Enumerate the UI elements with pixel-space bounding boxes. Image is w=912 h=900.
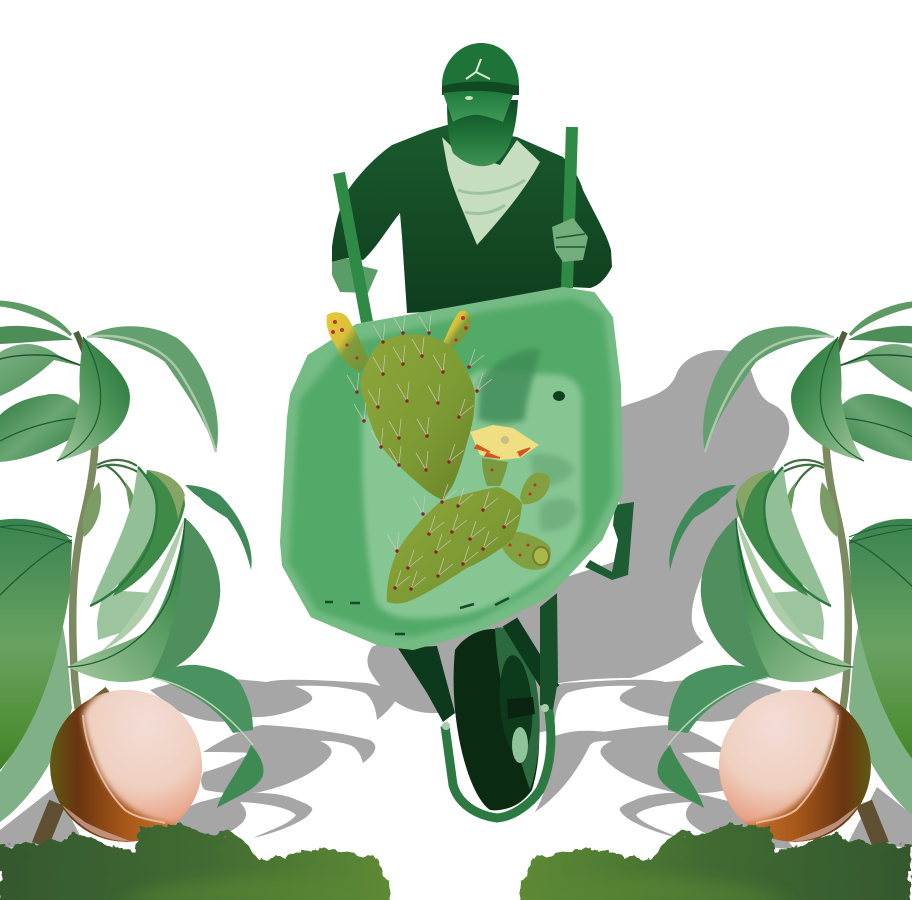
peach lower rim xyxy=(62,805,130,841)
peach skin xyxy=(50,690,202,842)
left handle xyxy=(339,173,367,322)
large left leaf xyxy=(0,519,72,770)
third leaf xyxy=(0,344,85,396)
top right leaf xyxy=(87,326,218,452)
left strut xyxy=(398,646,455,722)
lower right leaf xyxy=(153,665,253,733)
tyre side wall xyxy=(495,627,540,790)
wheelbarrow tray xyxy=(283,290,620,647)
right peach plant xyxy=(658,302,912,845)
left hand xyxy=(332,258,378,293)
cap band xyxy=(442,82,519,95)
upper left leaf edge xyxy=(0,525,72,543)
nub end xyxy=(533,547,549,565)
flower xyxy=(470,425,539,460)
lower pad xyxy=(387,487,522,604)
wheel and frame xyxy=(398,593,558,818)
peach crease xyxy=(83,715,165,823)
rim hub xyxy=(512,727,528,763)
tray outer rim xyxy=(283,290,620,647)
left bush xyxy=(0,824,392,900)
left wide leaf xyxy=(0,394,79,462)
tyre xyxy=(454,629,539,810)
top nub xyxy=(520,473,550,504)
thin branches xyxy=(97,460,138,490)
big leaf light strip xyxy=(100,517,185,652)
shadow: right plant xyxy=(535,678,912,850)
u frame xyxy=(445,706,551,818)
flower centre xyxy=(501,436,509,444)
upper stem xyxy=(76,332,90,372)
shadow: gardener cast shadow xyxy=(367,350,789,740)
tray basin xyxy=(362,370,582,618)
upper pad xyxy=(360,334,475,500)
rear leg xyxy=(585,502,634,580)
visor xyxy=(443,91,513,122)
shadow: left plant xyxy=(0,678,397,850)
sweater xyxy=(332,125,612,313)
peach xyxy=(50,682,209,842)
tray hole xyxy=(553,391,565,401)
top thin leaf xyxy=(0,302,71,335)
tray body xyxy=(293,302,610,633)
big lower leaf xyxy=(68,518,220,682)
light back leaf xyxy=(0,622,72,822)
cactus xyxy=(327,311,551,604)
rim xyxy=(497,654,535,756)
right strut xyxy=(540,593,558,710)
gardener xyxy=(332,43,612,322)
cap crown xyxy=(442,43,519,88)
upper twig xyxy=(93,690,108,702)
shadow: wheel xyxy=(535,731,607,812)
shirt fold xyxy=(458,180,525,214)
shirt xyxy=(442,137,540,245)
flower base red xyxy=(475,445,530,458)
light lower back leaf xyxy=(97,590,153,640)
small back leaf xyxy=(125,482,135,512)
second thin leaf xyxy=(0,326,73,344)
spines upper pad xyxy=(347,314,492,472)
bud right xyxy=(442,311,471,351)
diagonal brace xyxy=(510,622,552,690)
spines lower pad xyxy=(387,484,519,591)
bolts xyxy=(442,704,549,730)
third tray shadow xyxy=(540,498,577,531)
upper middle leaf xyxy=(90,467,157,606)
cap logo xyxy=(466,59,490,79)
visor logo xyxy=(465,96,473,100)
big leaf rim xyxy=(150,518,220,678)
right handle xyxy=(567,127,572,288)
back dark olive leaf xyxy=(113,470,185,596)
face xyxy=(447,100,518,166)
bud and nub spots xyxy=(331,316,536,556)
bush lower light patch xyxy=(120,877,385,900)
right bush xyxy=(518,824,910,900)
centre hanging leaf xyxy=(57,337,130,461)
lower twig xyxy=(40,803,57,845)
right hand xyxy=(552,218,588,262)
peach pink blush xyxy=(83,682,209,824)
bush mass xyxy=(0,824,392,900)
finger lines xyxy=(556,234,585,247)
left peach plant xyxy=(0,302,263,845)
side nub xyxy=(500,532,551,570)
thin right leaf xyxy=(185,485,252,570)
bud left xyxy=(327,312,370,372)
curled leaf tail xyxy=(217,745,263,808)
second tray shadow xyxy=(530,453,575,488)
stem xyxy=(73,445,95,712)
small stem leaf xyxy=(83,482,101,537)
flower stem xyxy=(482,458,508,486)
tray cast shadow xyxy=(478,349,540,424)
rust marks xyxy=(325,598,509,634)
axle block xyxy=(507,697,535,719)
